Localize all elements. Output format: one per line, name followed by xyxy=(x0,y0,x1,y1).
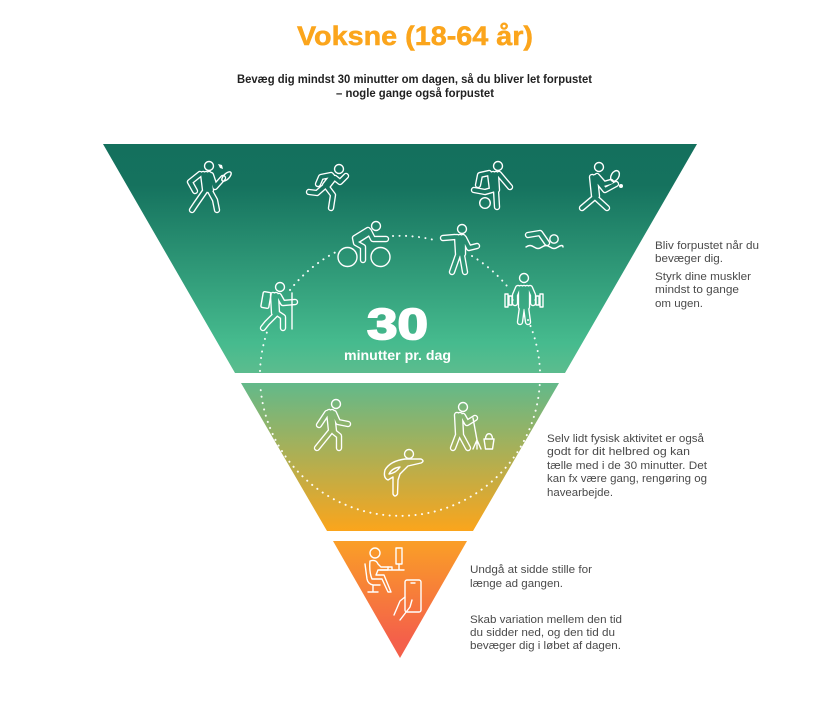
text: bottom band description: du sidder ned, og den tid du xyxy=(470,627,615,639)
text: middle band description: tælle med i de 30 minutter. Det xyxy=(547,460,708,472)
text: top band description: Styrk dine muskler xyxy=(655,271,751,283)
icon: weightlifter xyxy=(505,274,543,322)
panel: top band, high intensity xyxy=(103,144,697,373)
icon: balance pose xyxy=(384,450,423,496)
text: bottom band description: Skab variation mellem den tid xyxy=(470,614,622,626)
big number: 30 xyxy=(367,300,428,349)
text: top band description: mindst to gange xyxy=(655,284,739,296)
text: bottom band description: bevæger dig i løbet af dagen. xyxy=(470,640,621,652)
dotted 30 minute circle xyxy=(260,236,540,516)
panel: bottom band, sedentary xyxy=(333,541,467,658)
icon: runner xyxy=(309,164,346,208)
icon: tennis player xyxy=(582,162,623,208)
icon: badminton player xyxy=(190,162,233,210)
icon: football player xyxy=(474,162,510,208)
panel: middle band, light activity xyxy=(241,383,559,531)
text: middle band description: godt for dit helbred og kan xyxy=(547,446,690,458)
subtitle xyxy=(237,74,592,100)
icon: cyclist xyxy=(338,222,390,266)
icon: hand holding phone xyxy=(394,580,421,620)
text: middle band description: Selv lidt fysisk aktivitet er også xyxy=(547,433,705,445)
text: bottom band description: Undgå at sidde stille for xyxy=(470,564,592,576)
text: middle band description: kan fx være gang, rengøring og xyxy=(547,473,707,485)
text: middle band description xyxy=(547,433,708,499)
middle band shape xyxy=(241,383,559,531)
icon: gardener with rake and bucket xyxy=(453,402,494,449)
text: top band description xyxy=(655,240,759,310)
bottom band shape xyxy=(333,541,467,658)
number caption: minutter pr. dag xyxy=(344,348,451,363)
text: top band description: om ugen. xyxy=(655,298,703,310)
subtitle: – nogle gange også forpustet xyxy=(336,88,494,100)
text: middle band description: havearbejde. xyxy=(547,487,613,499)
icon: swimmer xyxy=(526,233,563,248)
subtitle: Bevæg dig mindst 30 minutter om dagen, så du bliver let forpustet xyxy=(237,74,592,86)
top band shape xyxy=(103,144,697,373)
text: bottom band description: længe ad gangen. xyxy=(470,578,563,590)
title: Voksne (18-64 år) xyxy=(297,21,533,51)
icon: walker xyxy=(317,400,348,448)
icon: dancer xyxy=(443,224,477,272)
text: top band description: Bliv forpustet når du xyxy=(655,240,759,252)
text: top band description: bevæger dig. xyxy=(655,253,723,265)
icon: person at desk xyxy=(365,548,404,592)
icon: hiker xyxy=(261,282,295,329)
text: bottom band description xyxy=(470,564,622,652)
